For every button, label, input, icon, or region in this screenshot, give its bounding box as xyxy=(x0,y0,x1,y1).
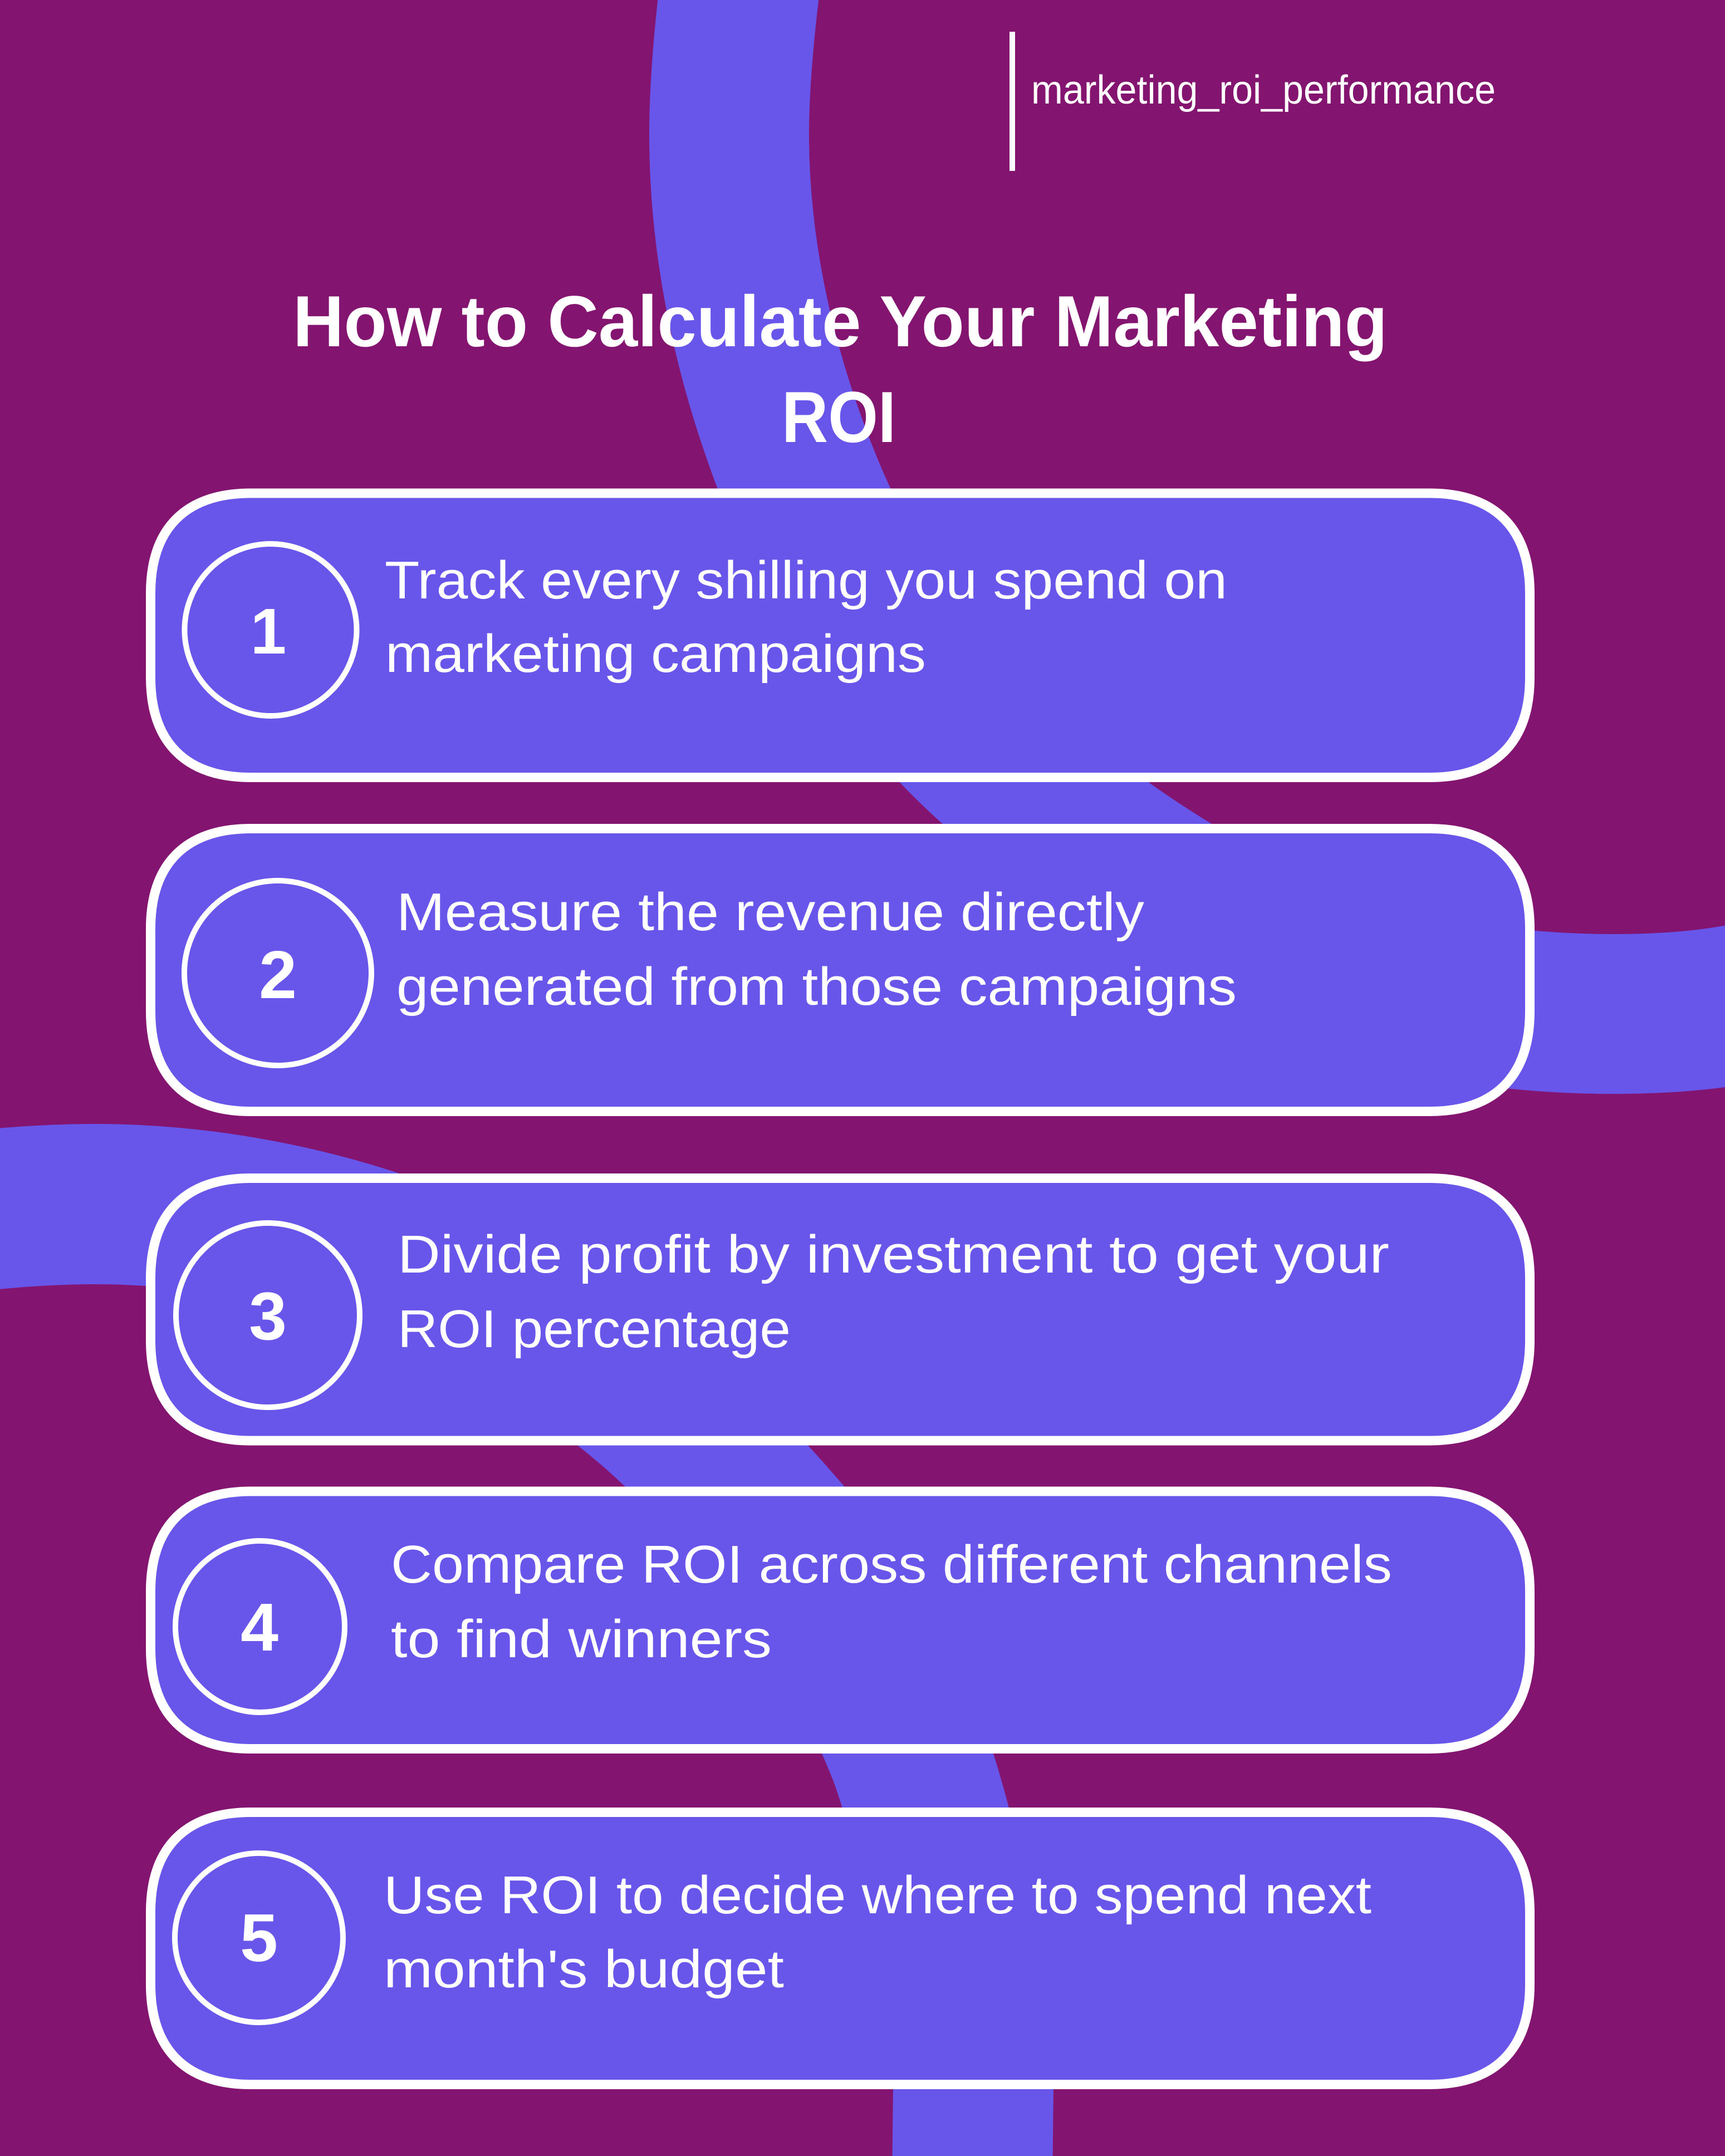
title: How to Calculate Your Marketing xyxy=(293,281,1388,362)
step 5 text: Use ROI to decide where to spend next xyxy=(384,1865,1371,1925)
step 5 number badge: 5 xyxy=(240,1900,278,1976)
step 2 number badge xyxy=(184,881,371,1065)
step 1 card xyxy=(150,493,1530,777)
brand divider xyxy=(1009,32,1015,171)
step 1 number badge: 1 xyxy=(251,595,286,667)
step 1 text: Track every shilling you spend on xyxy=(385,551,1227,610)
step 3 card xyxy=(150,1178,1530,1441)
title: ROI xyxy=(782,376,896,458)
step 2 card xyxy=(150,828,1530,1111)
step 5 number badge xyxy=(175,1853,343,2022)
step 4 text xyxy=(391,1535,1392,1669)
title xyxy=(293,281,1388,458)
step 1 text: marketing campaigns xyxy=(385,624,926,684)
step 2 text: Measure the revenue directly xyxy=(396,882,1144,942)
step 5 text: month's budget xyxy=(384,1939,784,1999)
background band: lower S-curve xyxy=(0,1204,973,2156)
step 1 text xyxy=(385,551,1227,684)
step 3 text: Divide profit by investment to get your xyxy=(398,1225,1389,1284)
step 5 text xyxy=(384,1865,1371,1999)
step 3 text: ROI percentage xyxy=(398,1299,791,1359)
step 2 text: generated from those campaigns xyxy=(396,957,1237,1016)
step 3 number badge: 3 xyxy=(249,1278,287,1354)
step 3 number badge xyxy=(176,1223,360,1407)
step 4 number badge xyxy=(175,1541,345,1712)
step 4 card xyxy=(150,1491,1530,1749)
step 3 text xyxy=(398,1225,1389,1359)
step 4 text: to find winners xyxy=(391,1609,772,1669)
step 2 text xyxy=(396,882,1237,1016)
step 5 card xyxy=(150,1813,1530,2084)
step 2 number badge: 2 xyxy=(259,937,297,1013)
step 4 text: Compare ROI across different channels xyxy=(391,1535,1392,1594)
step 1 number badge xyxy=(185,544,356,716)
background band: upper S-curve xyxy=(729,0,1725,1014)
brand handle: marketing_roi_performance xyxy=(1031,68,1496,112)
step 4 number badge: 4 xyxy=(241,1589,278,1665)
